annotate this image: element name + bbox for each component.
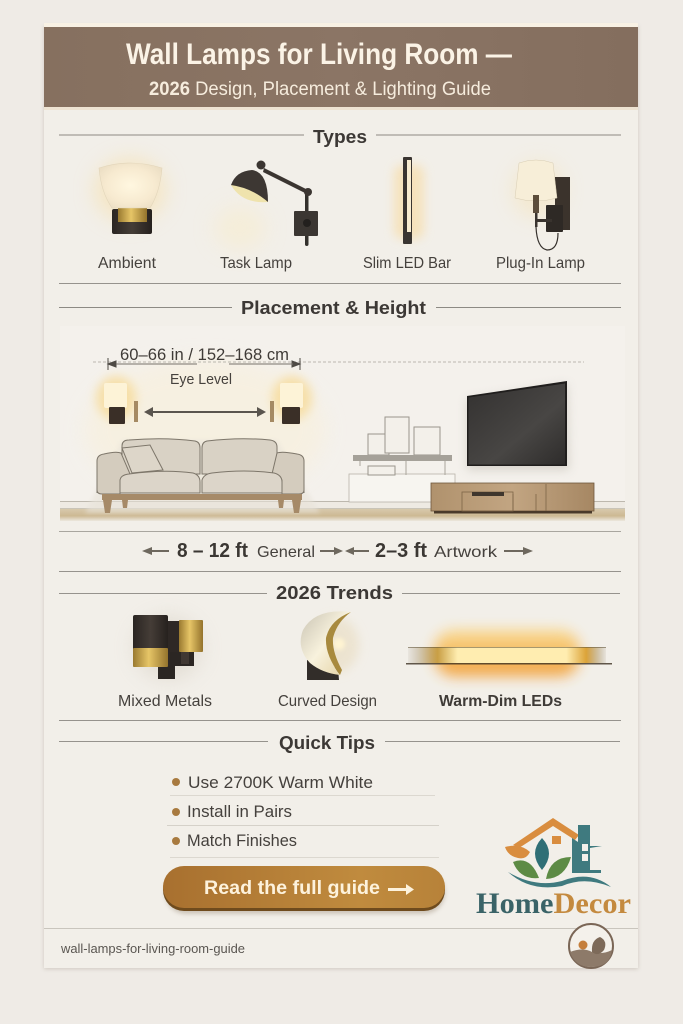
tip: match finishes: Match Finishes	[187, 832, 297, 850]
tv stand	[431, 483, 594, 514]
button: read the full guide: Read the full guide	[204, 878, 380, 899]
heading: placement and height: Placement & Height	[241, 297, 426, 318]
tip: use 2700K warm white: Use 2700K Warm White	[188, 774, 373, 792]
sofa	[85, 439, 320, 513]
footer url slug: wall-lamps-for-living-room-guide	[60, 941, 245, 956]
footer	[44, 924, 638, 968]
title: Wall Lamps for Living Room —	[126, 38, 512, 71]
icon: curved design	[301, 611, 359, 680]
television	[467, 381, 569, 470]
label: ambient: Ambient	[98, 255, 157, 272]
label: mixed metals: Mixed Metals	[118, 693, 212, 710]
icon: task lamp	[214, 160, 318, 250]
dimension: eye level: 60–66 in / 152–168 cm	[120, 345, 289, 364]
icon: warm-dim LED strip	[406, 630, 612, 676]
arrows: middle	[320, 547, 369, 555]
house and leaves mark	[505, 818, 611, 887]
icon: slim LED bar	[394, 157, 424, 244]
label: plug-in lamp: Plug-In Lamp	[496, 255, 585, 272]
distance row: General	[257, 544, 315, 561]
label: task lamp: Task Lamp	[220, 255, 292, 272]
arrow: general left	[142, 547, 169, 555]
label: slim LED bar: Slim LED Bar	[363, 255, 452, 272]
floor	[60, 508, 625, 521]
distance row	[142, 540, 533, 562]
tip: install in pairs: Install in Pairs	[187, 803, 292, 821]
distance row: Artwork	[434, 544, 498, 561]
shelf with frames	[349, 417, 455, 502]
heading: types: Types	[313, 126, 367, 147]
heading: quick tips: Quick Tips	[279, 732, 375, 753]
subtitle: 2026 Design, Placement & Lighting Guide	[149, 79, 491, 100]
section: placement and height	[44, 297, 638, 968]
section: 2026 trends	[59, 582, 620, 710]
header banner	[44, 23, 638, 110]
lamp pair with spacing arrow	[96, 376, 312, 424]
section: quick tips	[59, 732, 620, 914]
heading: 2026 trends: 2026 Trends	[276, 582, 393, 603]
icon: mixed metals	[133, 615, 203, 680]
dimension: eye level	[93, 345, 584, 388]
button: read the full guide	[163, 866, 445, 914]
footer badge	[569, 924, 613, 968]
section: types	[59, 126, 621, 272]
arrow: artwork right	[504, 547, 533, 555]
label: curved design: Curved Design	[278, 693, 377, 710]
label: warm-dim LEDs: Warm-Dim LEDs	[439, 693, 562, 710]
icon: plug-in lamp	[512, 160, 570, 250]
dimension: eye level: Eye Level	[170, 371, 232, 388]
distance: general: 8 – 12 ft	[177, 540, 248, 562]
icon: ambient lamp	[94, 158, 166, 234]
logo: HomeDecor: HomeDecor	[476, 887, 631, 920]
room scene	[60, 326, 625, 521]
logo: HomeDecor	[476, 818, 631, 920]
distance: artwork: 2–3 ft	[375, 540, 427, 562]
